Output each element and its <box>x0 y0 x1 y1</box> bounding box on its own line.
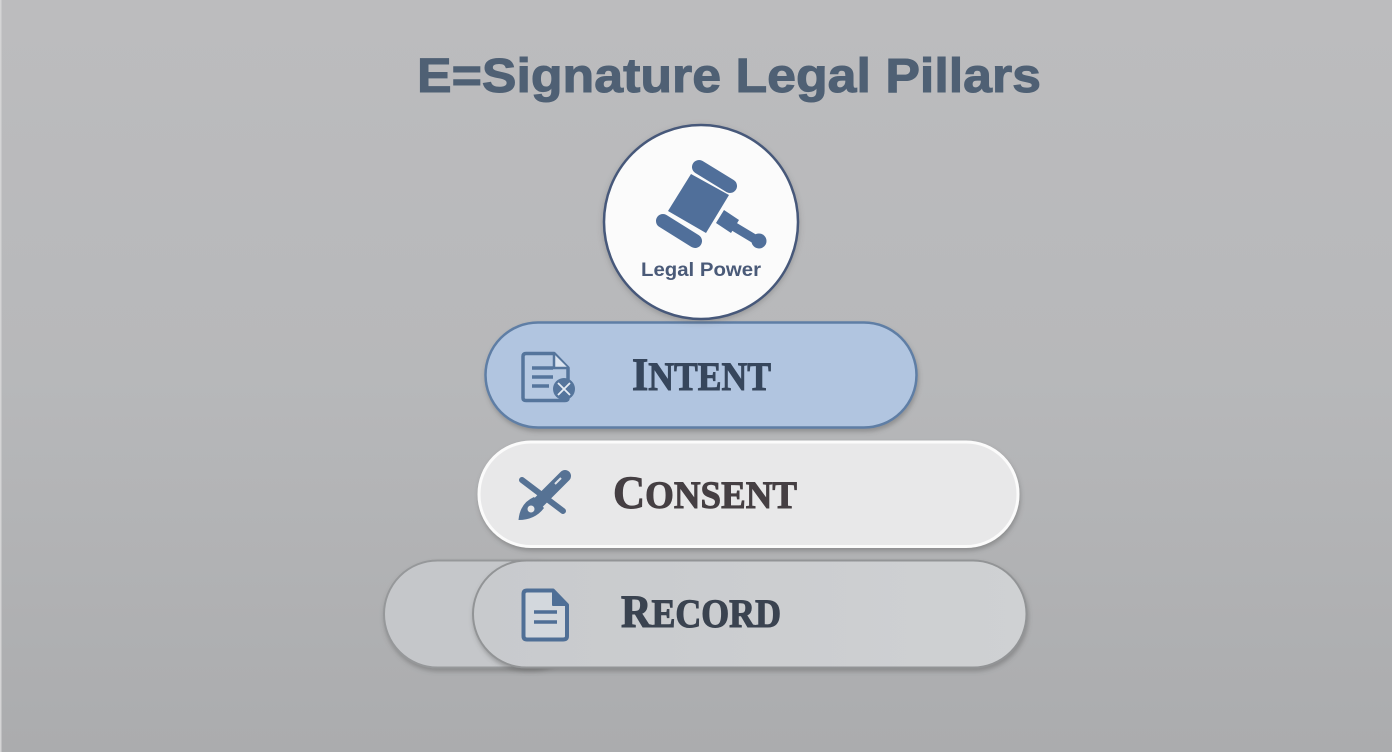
icon: document with x <box>523 354 575 400</box>
pillar: record <box>473 560 1026 668</box>
title: E=Signature Legal Pillars <box>417 50 1041 103</box>
label: legal power: Legal Power <box>641 260 762 281</box>
icon: crossed pen and tool <box>518 476 565 520</box>
pillar: intent <box>486 322 916 428</box>
pillar: record back tab <box>384 560 584 668</box>
pillar: consent <box>479 442 1018 546</box>
label: consent: CONSENT <box>613 467 797 519</box>
label: record: RECORD <box>621 586 781 638</box>
label: intent: INTENT <box>632 349 771 401</box>
icon: document <box>524 590 567 640</box>
icon: gavel <box>663 167 766 248</box>
badge: legal power <box>604 125 798 319</box>
